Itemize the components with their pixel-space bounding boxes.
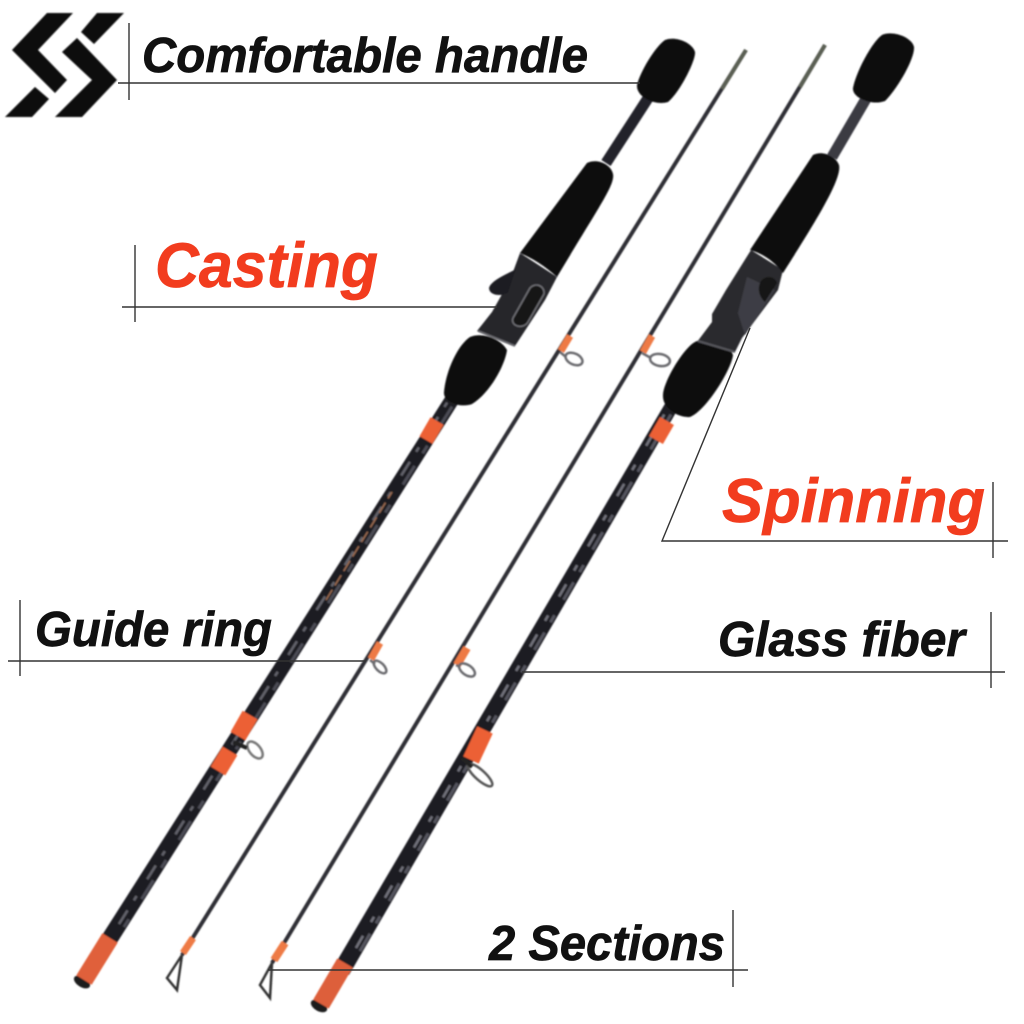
top foam knob: casting [637,39,695,103]
rear grip: casting [444,335,507,405]
rod blank: casting [99,391,461,949]
upper shaft: casting [606,92,652,163]
orange wraps: spinning [471,421,667,760]
guide ring: casting butt [233,739,266,761]
top foam knob: spinning [853,33,914,103]
callout: spinning [662,328,1008,558]
tip blank [272,45,825,963]
upper shaft: spinning [832,92,870,157]
callout: guide ring: Guide ring [35,603,272,657]
callout: casting: Casting [155,231,378,301]
callout: 2 sections: 2 Sections [488,917,725,971]
rod blank: spinning [334,402,678,975]
orange butt cap: spinning [309,963,345,1015]
orange wraps [183,336,570,953]
callout: glass fiber: Glass fiber [718,613,968,667]
orange butt cap: casting [72,938,110,991]
reel seat: spinning [697,250,783,352]
rear grip: spinning [663,340,733,417]
rod tip section: spinning [260,45,825,998]
orange wraps: casting [218,421,437,771]
tip blank [182,50,746,955]
callout: comfortable handle: Comfortable handle [142,29,588,83]
rod: spinning butt section [309,33,914,1015]
reel seat: casting [477,253,557,346]
fore grip: spinning [750,153,839,273]
guide rings [370,350,584,675]
tip top ring [260,963,272,998]
tip top ring [167,955,182,990]
rod: casting butt section [72,39,695,991]
guide ring: spinning butt [462,758,495,789]
logo [5,13,124,117]
fore grip: casting [520,161,613,277]
orange wraps [274,336,652,960]
callout: spinning: Spinning [722,467,985,536]
guide rings [456,352,671,679]
rod tip section: casting [167,50,746,990]
